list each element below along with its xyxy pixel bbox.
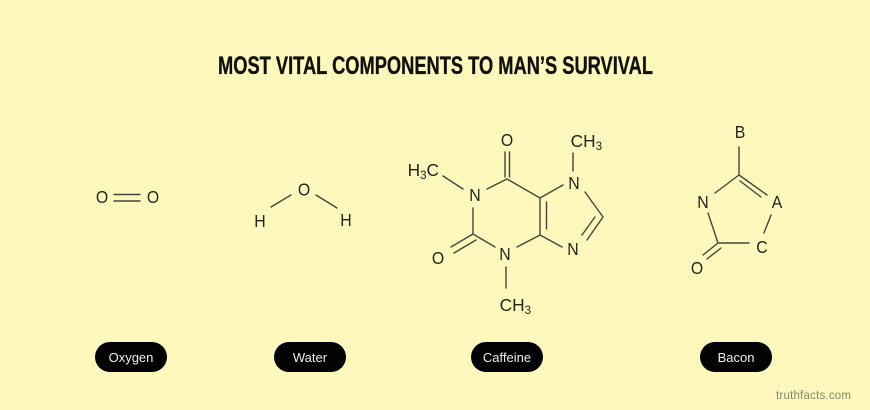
- molecule: caffeine: C: [427, 160, 439, 180]
- label: Water: [274, 342, 346, 372]
- molecule: bacon: N: [697, 192, 709, 212]
- molecule: caffeine: CH: [571, 131, 596, 151]
- molecule: water: [254, 180, 352, 231]
- molecule: bacon: A: [772, 192, 783, 212]
- molecule: caffeine: N: [469, 185, 481, 205]
- molecule: caffeine: 3: [596, 140, 602, 153]
- molecule: oxygen: O: [96, 187, 108, 207]
- molecule: bacon: [691, 122, 783, 278]
- label: Bacon: [700, 342, 772, 372]
- molecule: bacon: O: [691, 258, 703, 278]
- molecule: oxygen: [96, 187, 159, 207]
- molecule: caffeine: O: [501, 130, 513, 150]
- source credit: truthfacts.com: [776, 390, 851, 402]
- molecule: water: H: [254, 211, 266, 231]
- molecule: caffeine: H: [408, 160, 420, 180]
- molecule: caffeine: 3: [525, 304, 531, 317]
- molecule: caffeine: N: [567, 239, 579, 259]
- molecule: caffeine: N: [568, 173, 580, 193]
- molecule: caffeine: CH: [500, 295, 525, 315]
- molecule: caffeine: N: [499, 244, 511, 264]
- molecule: water: O: [298, 180, 310, 200]
- label: Oxygen: [95, 342, 167, 372]
- label: Bacon: Bacon: [718, 350, 754, 365]
- molecule: oxygen: O: [147, 187, 159, 207]
- label: Caffeine: [471, 342, 543, 372]
- molecule: bacon: C: [756, 237, 768, 257]
- molecule: caffeine: 3: [420, 169, 427, 182]
- molecule: water: H: [340, 210, 352, 230]
- label: Oxygen: Oxygen: [109, 350, 153, 365]
- molecule: bacon: B: [735, 122, 745, 142]
- label: Water: Water: [293, 350, 328, 365]
- title: MOST VITAL COMPONENTS TO MAN’S SURVIVAL: [218, 52, 653, 80]
- label: Caffeine: Caffeine: [483, 350, 531, 365]
- molecule: caffeine: [408, 130, 603, 317]
- molecule: caffeine: O: [432, 248, 444, 268]
